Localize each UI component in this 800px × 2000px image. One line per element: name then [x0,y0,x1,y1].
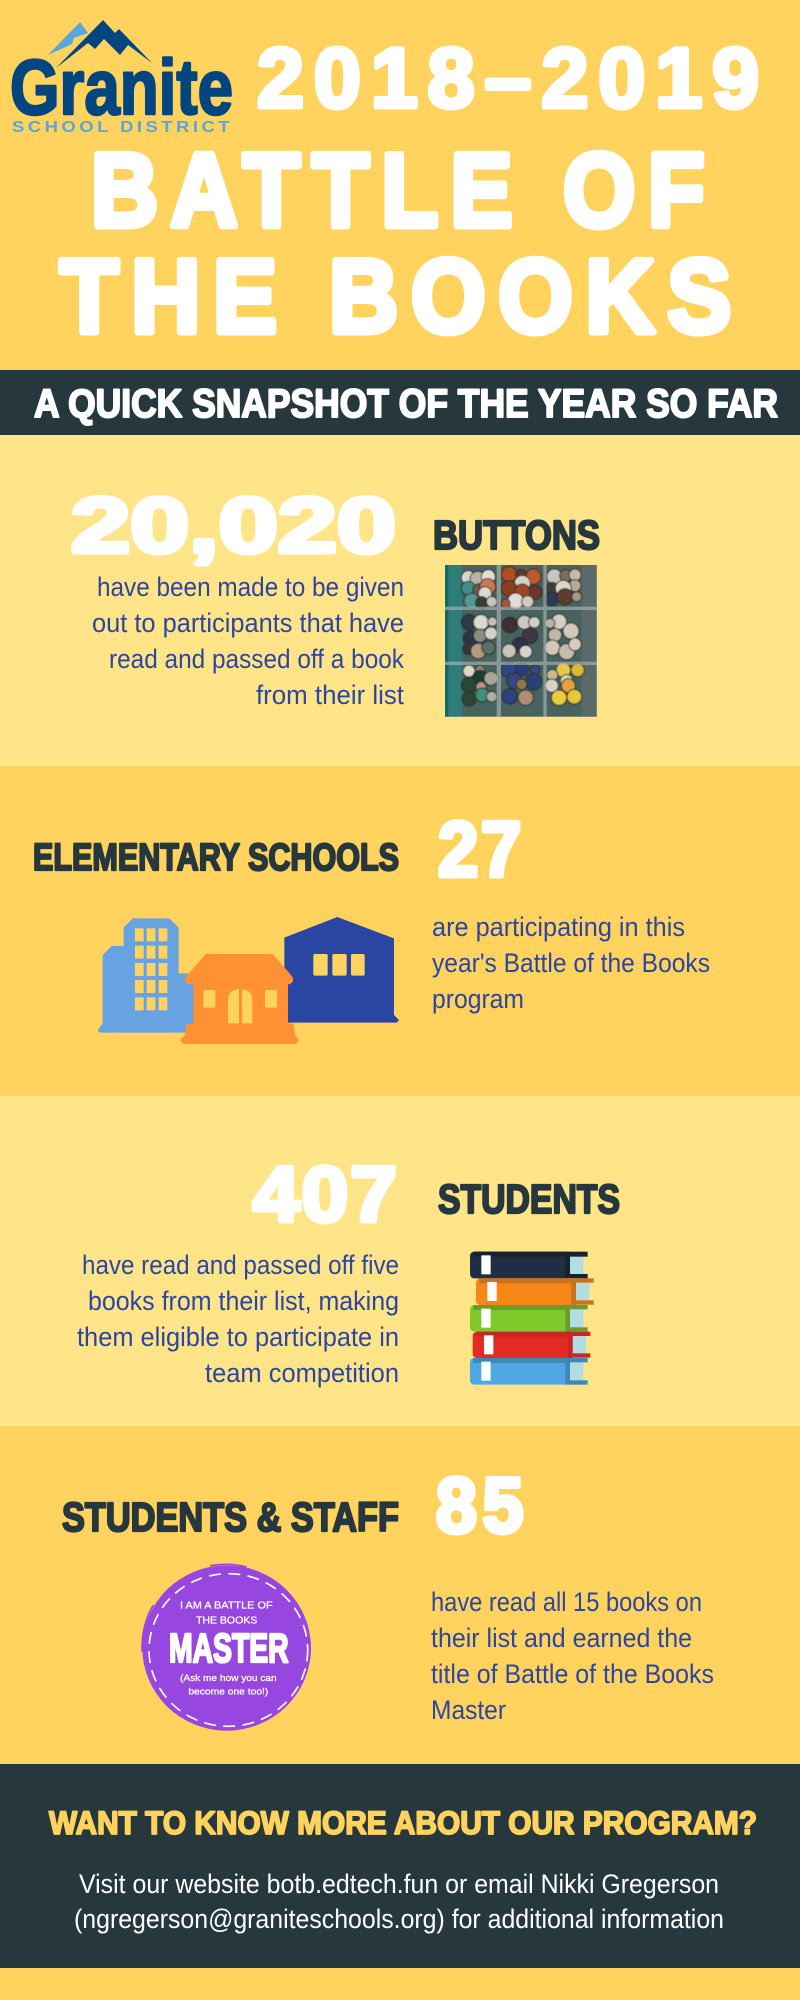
stat: 85: 85 [436,1461,529,1549]
body text: buttons: read and passed off a book [109,644,404,674]
stat: 407: 407 [253,1150,399,1238]
body text: master: Master [431,1695,506,1725]
panel: elementary schools [0,766,800,1096]
panel: students [0,1096,800,1426]
logo: Granite School District: Granite [10,43,233,131]
heading: students: STUDENTS [438,1176,620,1222]
book: navy [470,1252,588,1278]
panel: footer [0,1764,800,1968]
title: the books: THE BOOKS [60,239,744,355]
badge: battle of the books master: THE BOOKS [196,1616,257,1627]
body text: buttons [92,572,404,710]
badge: battle of the books master: MASTER [169,1625,289,1671]
footer contact text: Visit our website botb.edtech.fun or email Nikki Gregerson [79,1869,719,1899]
body text: schools: are participating in this [432,912,685,942]
stat: 27: 27 [438,805,524,893]
body text: buttons: out to participants that have [92,608,404,638]
title: year: 2018–2019 [257,31,769,125]
icon: school buildings [98,917,399,1044]
footer contact text: (ngregerson@graniteschools.org) for additional information [74,1904,724,1934]
badge: battle of the books master [142,1564,311,1731]
book: red [473,1332,590,1358]
body text: schools: program [432,984,524,1014]
footer contact text [74,1869,724,1934]
body text: buttons: from their list [256,680,404,710]
book: orange [476,1278,594,1305]
footer heading: WANT TO KNOW MORE ABOUT OUR PROGRAM? [49,1805,757,1841]
logo: Granite School District: SCHOOL DISTRICT [12,119,233,136]
title: battle of: BATTLE OF [91,133,717,249]
body text: students: books from their list, making [88,1286,399,1316]
body text: schools [432,912,710,1014]
body text: students: team competition [205,1358,399,1388]
banner: quick snapshot [0,370,800,435]
body text: master: title of Battle of the Books [431,1659,714,1689]
badge: battle of the books master: (Ask me how you can [180,1673,277,1683]
heading: elementary schools: ELEMENTARY SCHOOLS [33,837,399,879]
badge: battle of the books master: I AM A BATTLE OF [180,1600,273,1611]
icon: stack of books [470,1252,594,1385]
body text: students: them eligible to participate in [77,1322,399,1352]
heading: buttons: BUTTONS [433,512,600,558]
book: blue [470,1358,588,1385]
logo: Granite School District [10,20,233,136]
photo: box of buttons [445,565,597,717]
heading: students and staff: STUDENTS & STAFF [62,1494,399,1540]
panel: buttons [0,435,800,766]
body text: master [431,1587,714,1725]
body text: students [77,1250,399,1388]
body text: schools: year's Battle of the Books [432,948,710,978]
book: green [470,1305,588,1332]
panel: students and staff [0,1426,800,1764]
body text: master: their list and earned the [431,1623,692,1653]
body text: master: have read all 15 books on [431,1587,702,1617]
body text: students: have read and passed off five [82,1250,399,1280]
stat: 20,020: 20,020 [71,481,396,569]
body text: buttons: have been made to be given [97,572,404,602]
badge: battle of the books master: become one too!) [188,1686,268,1696]
header panel [0,0,800,370]
